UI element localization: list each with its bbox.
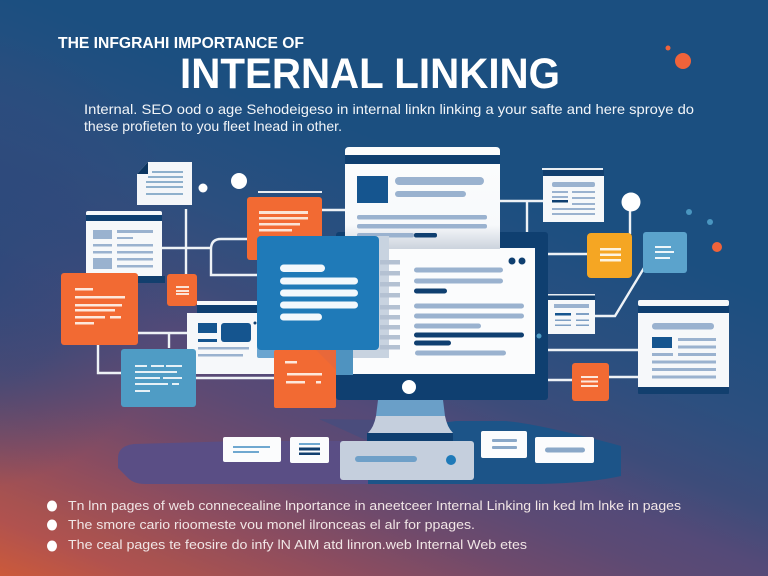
white circle node [622, 192, 640, 212]
screen content [414, 258, 526, 356]
panel: big orange note [61, 273, 138, 345]
panel: small browser window [187, 301, 277, 374]
card: desk card three [481, 431, 527, 458]
large white dot [231, 173, 247, 189]
panel: orange note [247, 191, 322, 260]
home button [402, 380, 416, 394]
icon: top left document [137, 162, 192, 205]
small white dot [198, 184, 208, 192]
title kicker: THE INFGRAHI IMPORTANCE OF [58, 35, 304, 52]
bezel dot [536, 334, 542, 338]
panel: large page behind monitor [345, 147, 500, 249]
decorative dots top right [666, 46, 691, 69]
decorative dots right [686, 209, 722, 252]
main title: INTERNAL LINKING [180, 50, 560, 98]
monitor screen [353, 248, 535, 374]
intro paragraph: Internal. SEO ood o age Sehodeigeso in internal linkn linking a your safte and here sproye do [84, 101, 694, 117]
light blue shadow panel [257, 345, 353, 375]
bullet item three: The ceal pages te feosire do infy lN AIM atd linron.web Internal Web etes [68, 537, 528, 552]
icon: yellow note [587, 233, 632, 278]
grey sidebar behind blue panel [353, 236, 400, 358]
panel: light blue note [121, 349, 196, 407]
panel: main blue note [257, 236, 379, 350]
panel: right browser window [638, 300, 729, 394]
monitor body [336, 232, 548, 400]
desk base shape [118, 419, 621, 484]
bullet item two: The smore cario rioomeste vou monel ilronceas el alr for ppages. [68, 517, 475, 532]
connector lines [98, 201, 644, 380]
panel: right small document [548, 294, 595, 334]
panel: lower orange note [274, 350, 336, 408]
intro paragraph: these profieten to you fleet lnead in other. [84, 118, 342, 134]
card: desk card one [223, 437, 281, 462]
monitor [336, 232, 548, 441]
icon: light blue note [643, 232, 687, 273]
intro paragraph [84, 101, 694, 134]
panel: left browser window [86, 211, 165, 283]
card: desk card four [535, 437, 594, 463]
icon: small orange note [167, 274, 197, 306]
card: desk card two [290, 437, 329, 463]
base unit [340, 441, 474, 480]
panel: top right small document [542, 168, 604, 222]
bullet item one: Tn lnn pages of web connecealine lnportance in aneetceer Internal Linking lin ked lm lnke in pages [68, 498, 682, 513]
icon: lower right orange note [572, 363, 609, 401]
monitor stand [367, 400, 453, 441]
bullet list [47, 498, 682, 552]
